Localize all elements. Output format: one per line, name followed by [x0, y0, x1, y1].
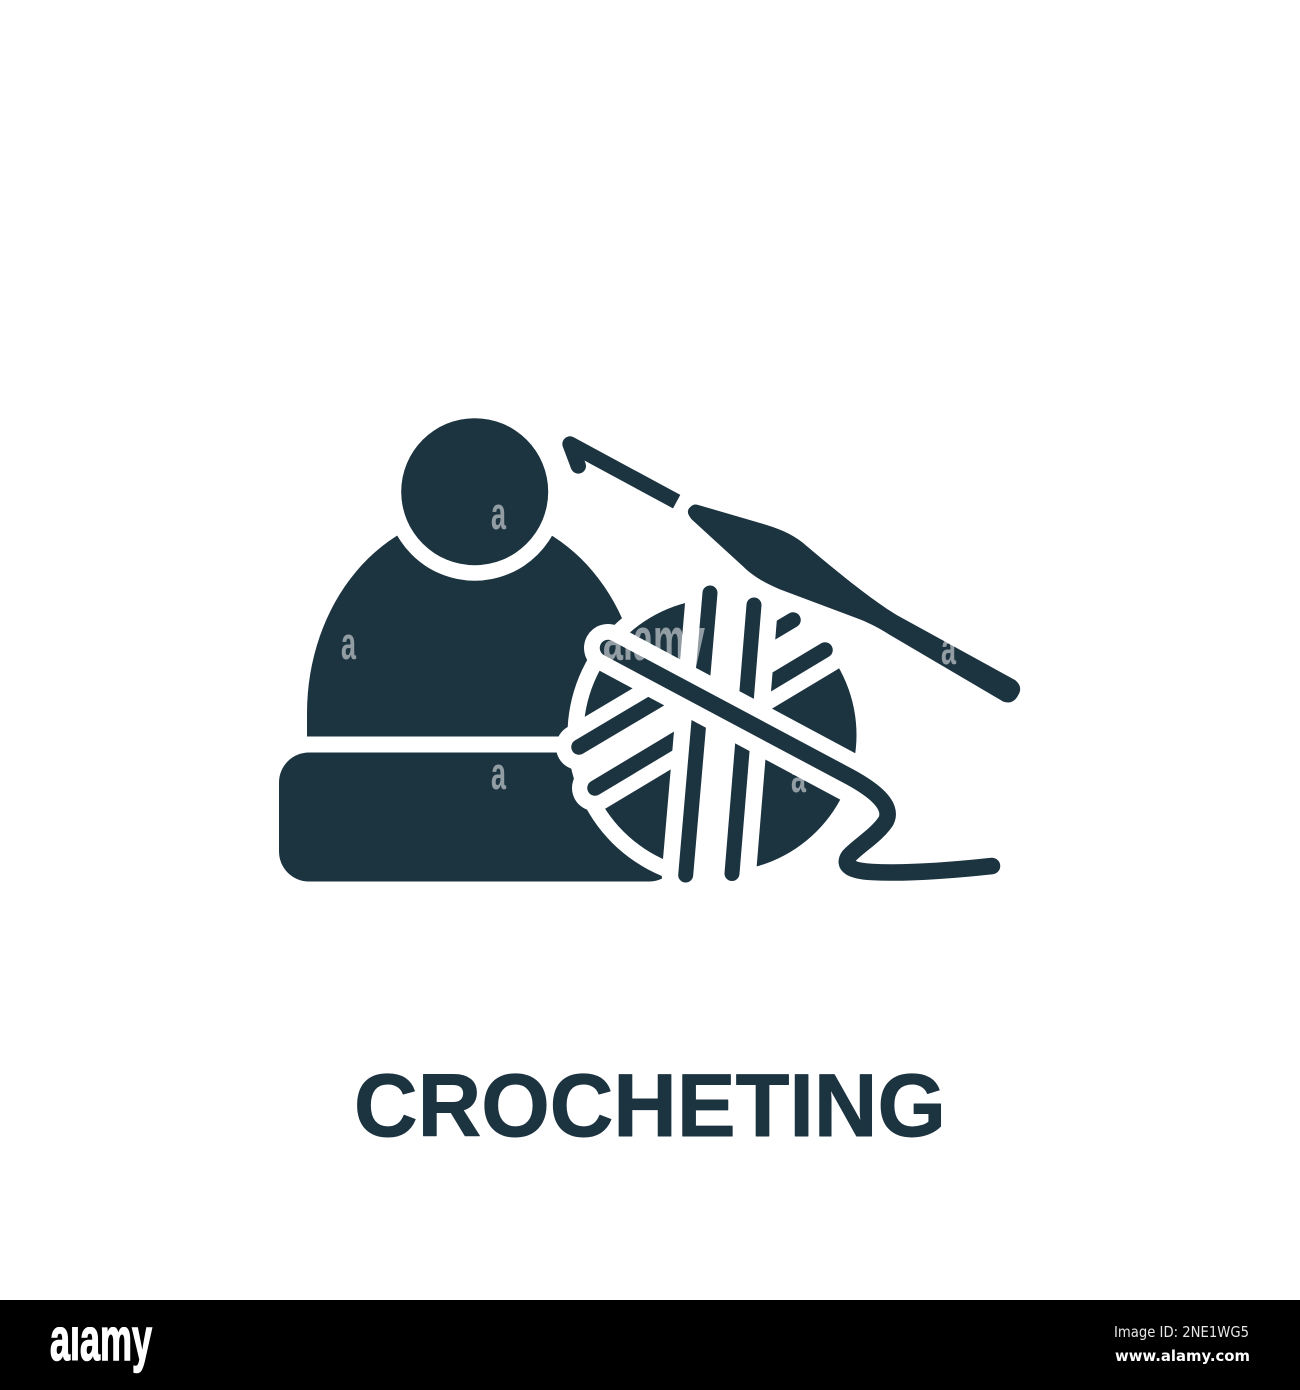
watermark letters: alamy — [603, 606, 705, 673]
title: CROCHETING — [354, 1055, 946, 1155]
watermark letters: a — [341, 618, 357, 669]
watermark letters: a — [491, 748, 507, 799]
icon: crocheting hat, yarn ball and hook — [279, 403, 1020, 888]
icon: pompom gap — [386, 403, 564, 581]
website: www.alamy.com — [1115, 1347, 1250, 1365]
watermark letters: a — [491, 488, 507, 539]
icon: hook shaft — [570, 444, 677, 502]
icon: pompom — [401, 418, 548, 565]
icon: hook handle — [688, 505, 1020, 702]
icon: loose yarn thread — [608, 648, 992, 873]
footer logo: alamy — [50, 1306, 152, 1373]
icon: hat dome — [307, 513, 642, 736]
footer bar — [0, 1300, 1300, 1390]
icon: yarn ball gap — [568, 582, 872, 888]
icon: yarn ball — [584, 598, 856, 872]
watermark letters: a — [941, 623, 957, 674]
image id: Image ID: 2NE1WG5 — [1114, 1323, 1249, 1341]
icon: yarn vertical strands — [686, 593, 754, 875]
watermark letters — [341, 488, 957, 802]
icon: crochet hook — [570, 444, 1020, 702]
infographic canvas — [0, 418, 1300, 1390]
watermark letters: a — [791, 751, 807, 802]
icon: hat brim — [279, 752, 679, 882]
icon: yarn cross strands — [579, 620, 825, 788]
